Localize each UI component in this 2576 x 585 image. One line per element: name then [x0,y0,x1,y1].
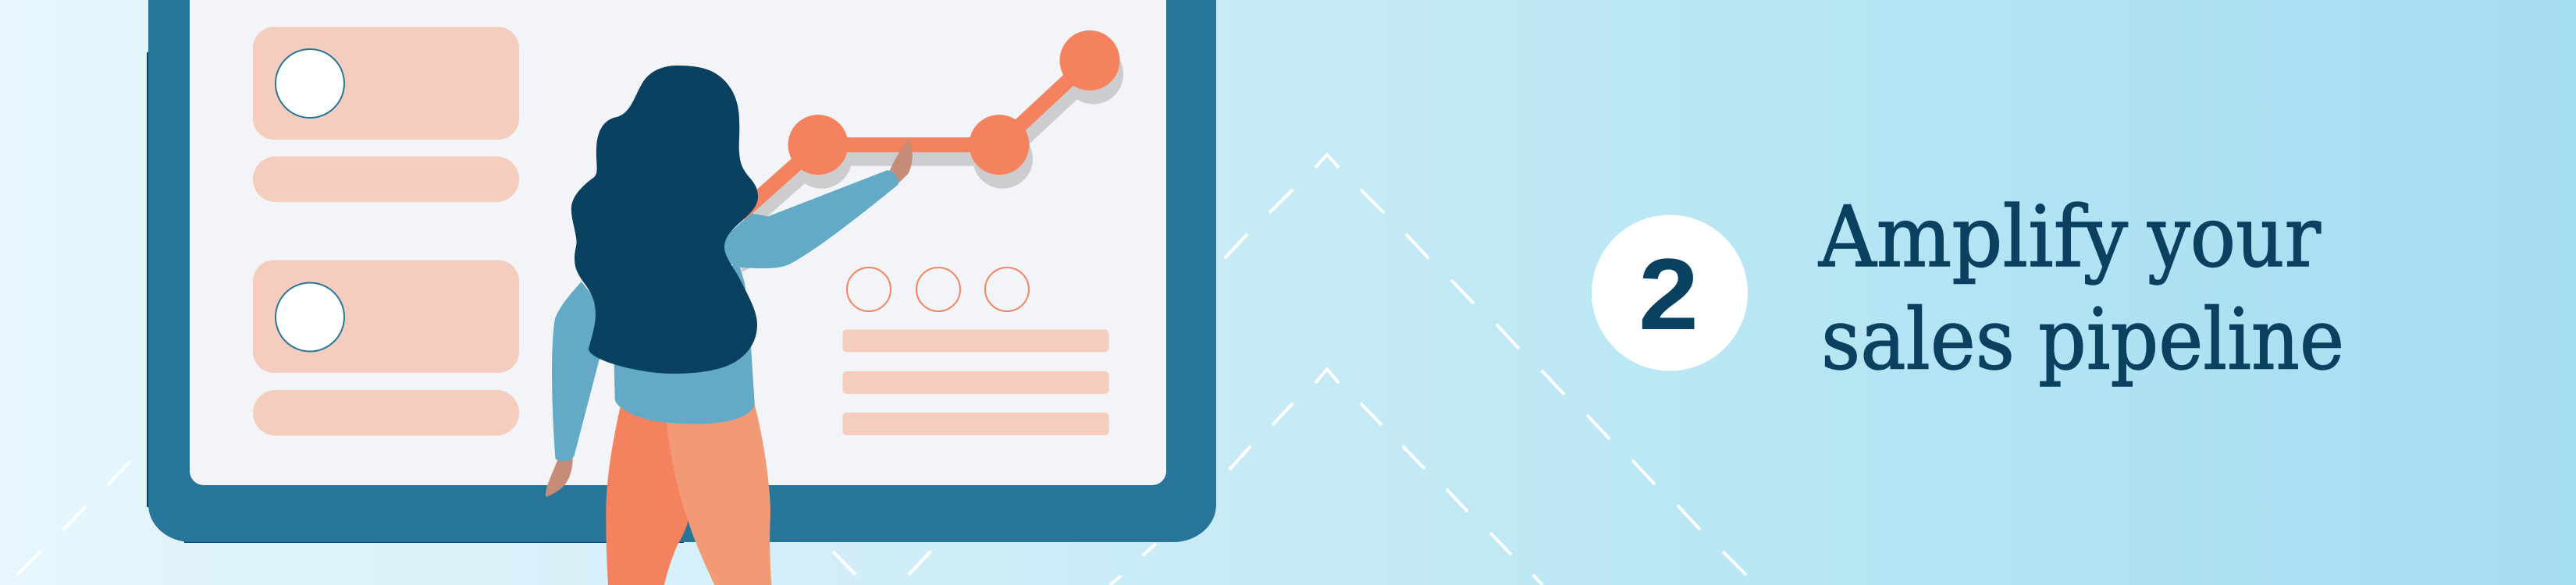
step number badge [1592,215,1748,371]
heading: your [2147,189,2321,286]
heading: sales [1821,292,2015,388]
heading: Amplify [1818,189,2128,286]
figure: woman pointing at chart [546,66,913,585]
card 2 [253,261,519,373]
panel: left cards [253,27,519,435]
card 1 [253,27,519,140]
panel: option circles and bars [843,268,1108,435]
heading [1818,189,2344,388]
pill 2 [253,390,519,435]
line chart [740,30,1123,272]
panel: tablet frame [147,0,1216,543]
heading: pipeline [2038,292,2344,388]
step number badge: 2 [1638,237,1699,351]
pill 1 [253,156,519,202]
